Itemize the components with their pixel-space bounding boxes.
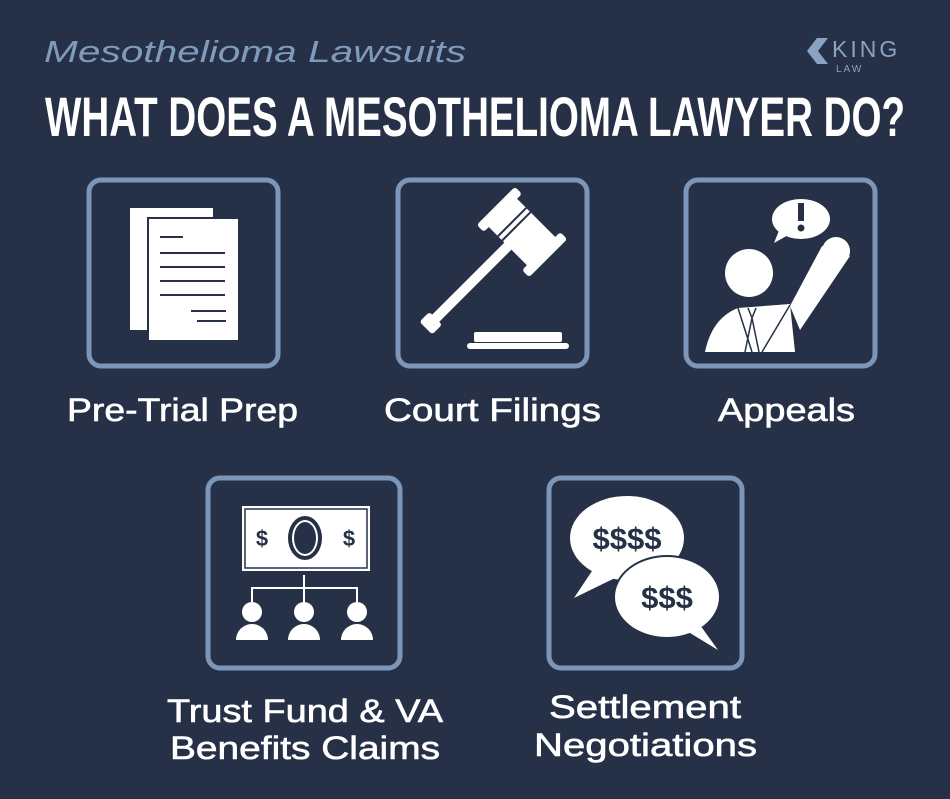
icon: speech bubbles: $$$$ bbox=[593, 521, 661, 556]
panel: settlement bbox=[549, 478, 742, 668]
label: settlement: Settlement bbox=[549, 689, 741, 725]
label: negotiations: Negotiations bbox=[534, 727, 757, 763]
icon: person raising hand bbox=[705, 199, 850, 352]
icon: bill and beneficiaries: $ bbox=[343, 526, 355, 551]
icon: bill and beneficiaries: $ bbox=[256, 526, 268, 551]
panel: pre-trial prep bbox=[89, 180, 278, 366]
panel: court filings bbox=[398, 180, 587, 366]
icon: gavel bbox=[400, 187, 569, 354]
panel: appeals bbox=[686, 180, 875, 366]
logo: King Law: LAW bbox=[836, 64, 863, 75]
label: trust fund: Trust Fund & VA bbox=[167, 693, 444, 729]
label: appeals: Appeals bbox=[718, 392, 855, 428]
label: court filings: Court Filings bbox=[384, 392, 601, 428]
label: benefits claims: Benefits Claims bbox=[170, 730, 440, 766]
icon: speech bubbles bbox=[570, 496, 720, 650]
icon: documents bbox=[130, 208, 240, 342]
icon: speech bubbles: $$$ bbox=[641, 580, 693, 615]
logo: King Law bbox=[807, 36, 900, 75]
panel: trust fund bbox=[208, 478, 400, 668]
label: pre-trial prep: Pre-Trial Prep bbox=[67, 392, 298, 428]
icon: bill and beneficiaries bbox=[236, 506, 373, 640]
logo: King Law: KING bbox=[832, 36, 900, 62]
subtitle: Mesothelioma Lawsuits bbox=[44, 34, 466, 69]
